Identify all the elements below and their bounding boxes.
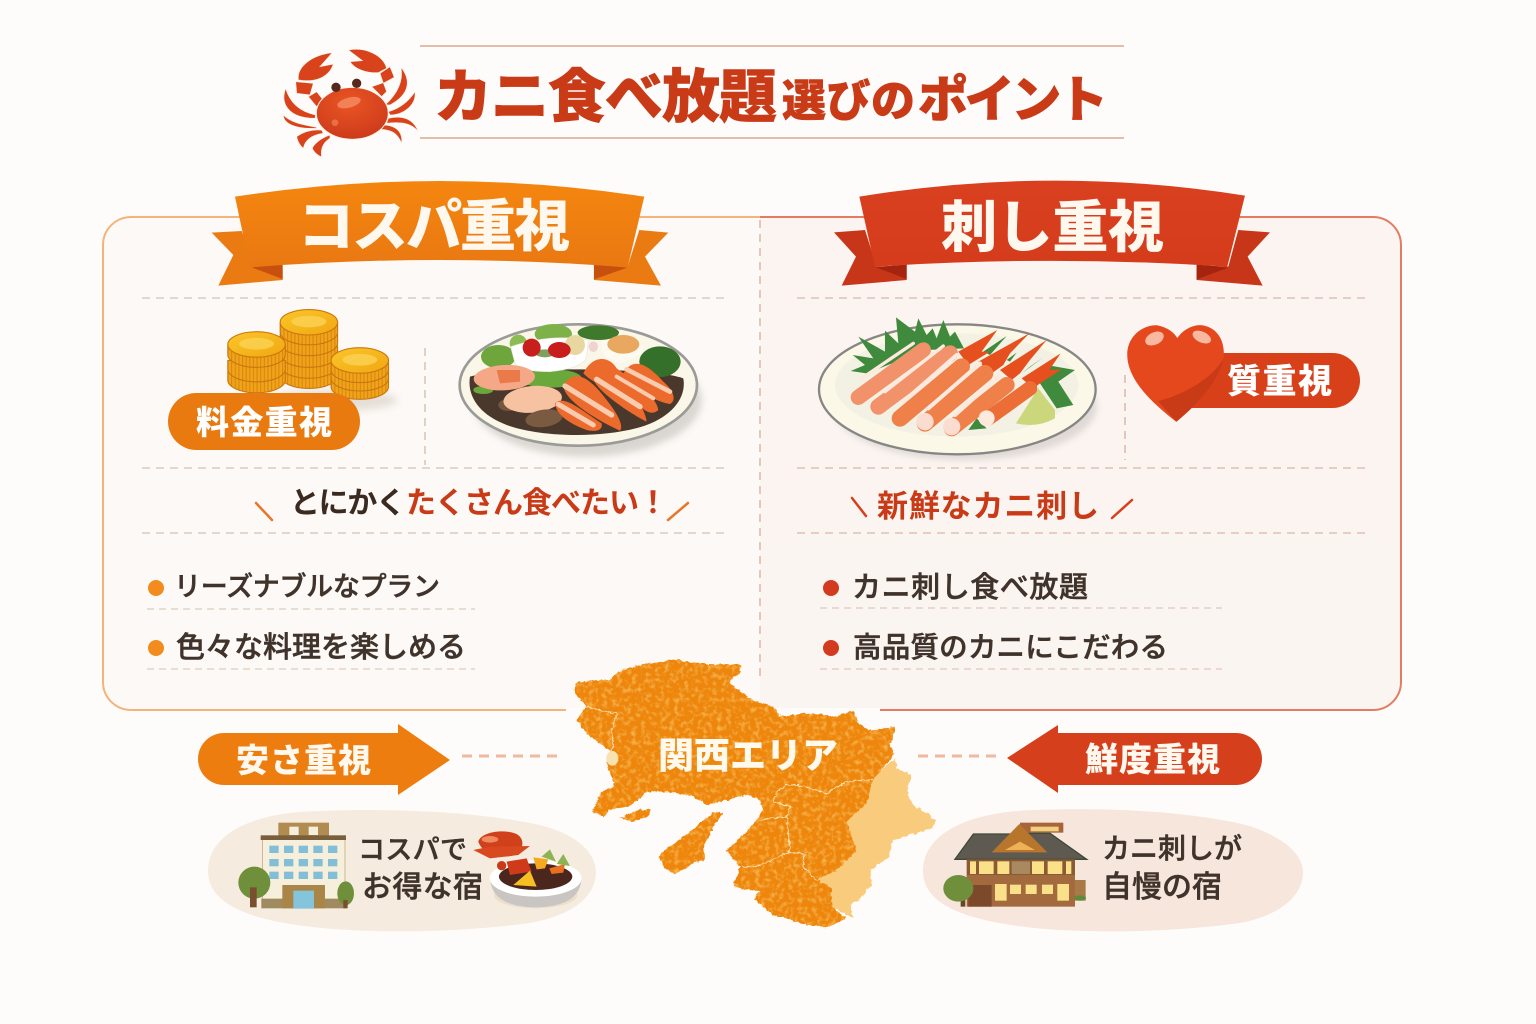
title [434, 65, 1108, 130]
icon: hotel [238, 823, 354, 909]
list: コスパ重視 features [147, 572, 475, 669]
icon: heart with badge 質重視 [1127, 325, 1360, 422]
title: ポイント [918, 72, 1108, 128]
icon: crab [283, 49, 418, 157]
subheading: とにかくたくさん食べたい！ [256, 487, 688, 520]
arrow: 鮮度重視 [1007, 725, 1262, 793]
badge: 料金重視 [168, 393, 360, 450]
panel: コスパでお得な宿: コスパで [358, 835, 467, 865]
title rules [420, 46, 1124, 138]
subheading: とにかくたくさん食べたい！: たくさん食べたい！ [406, 487, 668, 520]
title: 選びの [782, 77, 915, 126]
panel: カニ刺しが自慢の宿: カニ刺しが [1102, 833, 1242, 864]
map: Kansai area: 関西エリア [658, 735, 838, 776]
list: 刺し重視 features [820, 571, 1222, 669]
icon: crab dish [473, 831, 582, 908]
panel: カニ刺しが自慢の宿: 自慢の宿 [1102, 871, 1222, 904]
banner: コスパ重視 [212, 181, 668, 286]
arrow: 安さ重視 [198, 724, 450, 795]
panel: コスパでお得な宿: お得な宿 [362, 871, 483, 904]
badge: 料金重視: 料金重視 [196, 404, 332, 441]
subheading: 新鮮なカニ刺し: 新鮮なカニ刺し [877, 489, 1099, 524]
illustration: crab sashimi plate [819, 317, 1097, 460]
panel: カニ刺しが自慢の宿 [923, 809, 1303, 931]
icon: ryokan [943, 823, 1087, 907]
title: カニ食べ放題 [434, 65, 777, 130]
icon: coins [228, 310, 397, 411]
list: コスパ重視 features: 色々な料理を楽しめる [176, 631, 466, 664]
banner: 刺し重視 [834, 181, 1270, 286]
connector left [462, 754, 558, 758]
illustration: seafood plate [460, 324, 702, 457]
list: コスパ重視 features: リーズナブルなプラン [174, 572, 440, 602]
banner: 刺し重視: 刺し重視 [941, 196, 1164, 259]
arrow: 鮮度重視: 鮮度重視 [1085, 741, 1220, 778]
arrow: 安さ重視: 安さ重視 [236, 742, 371, 779]
subheading: とにかくたくさん食べたい！: とにかく [290, 487, 406, 520]
map: Kansai area [575, 660, 937, 928]
icon: heart with badge 質重視: 質重視 [1227, 363, 1332, 401]
connector right [918, 754, 1000, 758]
list: 刺し重視 features: 高品質のカニにこだわる [853, 632, 1168, 664]
panel: コスパでお得な宿 [208, 810, 596, 931]
list: 刺し重視 features: カニ刺し食べ放題 [852, 571, 1088, 604]
panel: comparison card [103, 217, 1401, 713]
banner: コスパ重視: コスパ重視 [298, 195, 570, 258]
